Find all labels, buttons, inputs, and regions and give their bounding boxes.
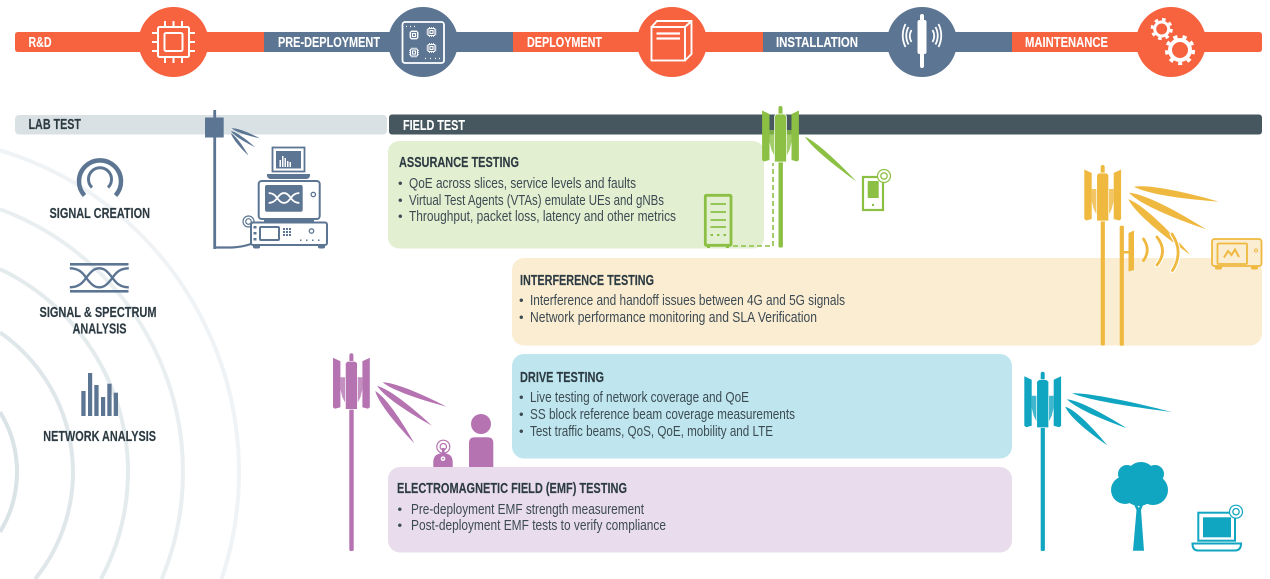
list: interference testing: • xyxy=(519,310,524,324)
list: interference testing xyxy=(519,292,845,326)
lab test bar xyxy=(15,115,387,134)
icon: eye diagram xyxy=(70,263,129,293)
icon: cabinet box xyxy=(652,21,692,60)
lab tower and instruments xyxy=(205,110,327,249)
stage: R&D: R&D xyxy=(28,35,52,51)
list: drive testing xyxy=(519,389,795,440)
lab antenna xyxy=(205,110,260,249)
lifecycle timeline xyxy=(15,7,1262,77)
icon: signal arcs xyxy=(79,160,121,196)
list: assurance testing xyxy=(398,175,676,225)
list: interference testing: Network performance monitoring and SLA Verification xyxy=(530,309,817,326)
list: assurance testing: • xyxy=(398,208,403,224)
icon: spectrum analyzer xyxy=(1212,239,1262,270)
field test bar xyxy=(389,114,1262,134)
stage: pre-deployment xyxy=(278,7,458,77)
left column: signal creation xyxy=(50,160,150,222)
panel: drive testing xyxy=(512,354,1012,458)
icon: laptop xyxy=(1192,505,1242,550)
stage: deployment: DEPLOYMENT xyxy=(527,35,602,51)
heading: drive testing: DRIVE TESTING xyxy=(520,370,604,386)
timeline bar xyxy=(15,32,1262,52)
list: interference testing: Interference and handoff issues between 4G and 5G signals xyxy=(530,292,845,309)
list: EMF testing: Post-deployment EMF tests to verify compliance xyxy=(411,517,666,534)
left column: network analysis: NETWORK ANALYSIS xyxy=(43,429,156,445)
icon: server rack xyxy=(705,195,731,248)
stage: deployment xyxy=(527,7,707,77)
list: drive testing: • xyxy=(519,406,524,422)
list: assurance testing: • xyxy=(398,192,403,208)
list: assurance testing: QoE across slices, service levels and faults xyxy=(409,175,636,192)
green beam xyxy=(803,135,858,183)
panel: interference testing xyxy=(512,258,1262,346)
panel: EMF testing xyxy=(388,467,1012,552)
list: assurance testing: Throughput, packet loss, latency and other metrics xyxy=(409,208,676,225)
purple tower, person and probe xyxy=(333,353,493,551)
icon: small antenna with waves xyxy=(1120,226,1178,346)
stage: installation xyxy=(776,7,957,77)
teal tower, tree and laptop xyxy=(1024,372,1242,551)
list: drive testing: • xyxy=(519,424,524,438)
left column: signal and spectrum analysis: SIGNAL & SPECTRUM xyxy=(40,305,156,321)
icon: gears xyxy=(1152,19,1194,64)
stage: maintenance: MAINTENANCE xyxy=(1025,35,1108,51)
icon: chip xyxy=(152,21,195,63)
left column: signal creation: SIGNAL CREATION xyxy=(50,206,150,222)
list: drive testing: Live testing of network coverage and QoE xyxy=(530,389,749,406)
lab test bar: LAB TEST xyxy=(28,117,81,133)
yellow beams xyxy=(1126,183,1219,258)
stage: R&D xyxy=(28,7,208,77)
list: drive testing: Test traffic beams, QoS, QoE, mobility and LTE xyxy=(530,423,773,440)
list: EMF testing: • xyxy=(398,518,402,532)
green tower and devices xyxy=(705,106,890,248)
test instruments xyxy=(243,148,327,248)
left column: network analysis xyxy=(43,373,156,445)
background signal rings xyxy=(0,150,239,579)
stage: installation: INSTALLATION xyxy=(776,35,858,51)
icon: person xyxy=(469,414,493,467)
purple beams xyxy=(373,380,448,445)
left column: signal and spectrum analysis xyxy=(40,263,156,338)
icon: purple tower xyxy=(333,353,370,551)
icon: antenna with waves xyxy=(903,14,941,68)
field test bar: FIELD TEST xyxy=(403,118,465,134)
icon: tree xyxy=(1111,462,1168,551)
list: drive testing: • xyxy=(519,390,524,404)
icon: bars xyxy=(81,373,118,416)
list: interference testing: • xyxy=(519,292,524,308)
icon: teal tower xyxy=(1024,372,1061,551)
icon: circuit board xyxy=(402,22,444,63)
stage: pre-deployment: PRE-DEPLOYMENT xyxy=(278,35,380,51)
heading: assurance testing: ASSURANCE TESTING xyxy=(399,155,519,171)
list: drive testing: SS block reference beam coverage measurements xyxy=(530,406,795,423)
icon: yellow tower xyxy=(1084,165,1121,346)
icon: phone xyxy=(863,170,890,210)
icon: green tower xyxy=(762,106,799,248)
panel: assurance testing xyxy=(388,141,764,248)
heading: interference testing: INTERFERENCE TESTING xyxy=(520,273,654,289)
icon: EMF probe xyxy=(433,440,453,467)
list: EMF testing: • xyxy=(398,502,402,516)
list: assurance testing: • xyxy=(398,176,403,190)
yellow towers and analyzer xyxy=(1084,165,1262,346)
list: EMF testing: Pre-deployment EMF strength measurement xyxy=(411,501,645,518)
teal beams xyxy=(1063,391,1172,447)
left column: signal and spectrum analysis: ANALYSIS xyxy=(72,322,127,338)
list: assurance testing: Virtual Test Agents (VTAs) emulate UEs and gNBs xyxy=(409,192,664,209)
list: EMF testing xyxy=(398,501,666,534)
heading: EMF testing: ELECTROMAGNETIC FIELD (EMF) TESTING xyxy=(397,481,627,497)
stage: maintenance xyxy=(1025,7,1206,77)
